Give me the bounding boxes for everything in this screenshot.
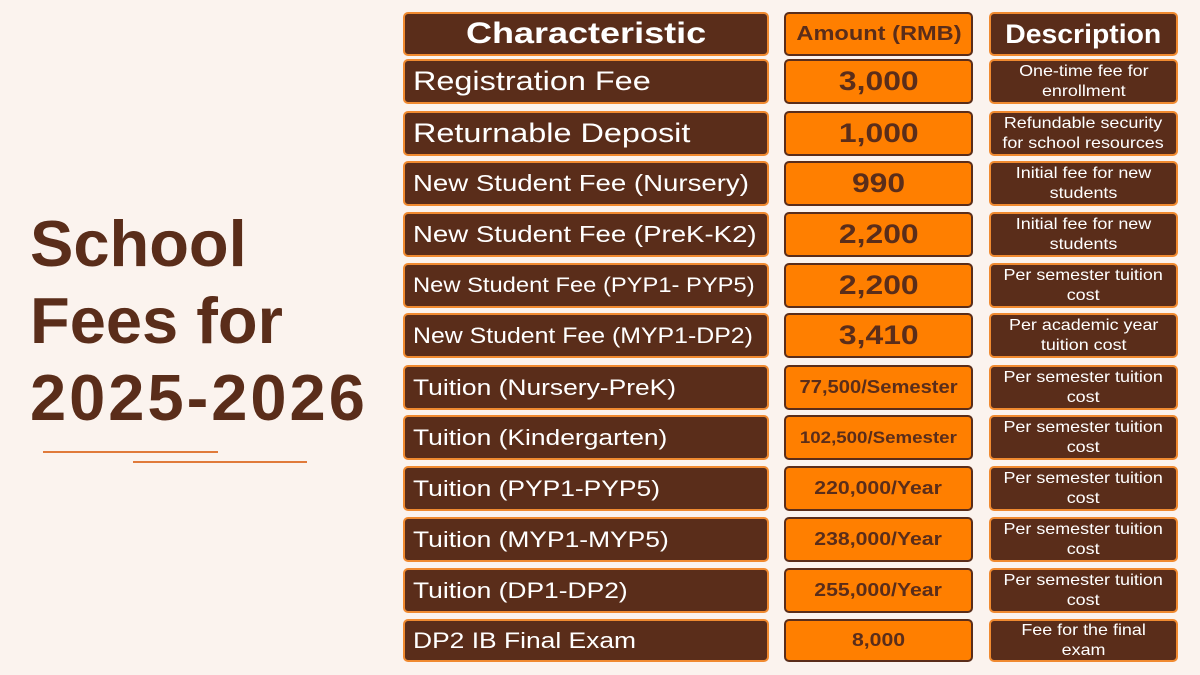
table rows: Tuition (DP1-DP2) [413,578,628,602]
table rows: 2,200 [839,219,918,249]
table rows: cost [1067,286,1100,304]
table rows: 102,500/Semester [800,428,957,446]
table rows: students [1050,236,1117,252]
table rows: Tuition (Nursery-PreK) [413,374,676,400]
table rows: Refundable security [1004,114,1163,132]
title: 2025-2026 [30,361,368,434]
table rows: Per semester tuition [1004,418,1163,436]
table rows: 3,410 [839,320,918,350]
header: characteristic: Characteristic [466,17,706,50]
table rows: 255,000/Year [815,580,942,600]
title [30,207,368,434]
table rows: Per semester tuition [1004,368,1163,386]
table rows: 77,500/Semester [799,377,958,397]
table rows: Per semester tuition [1004,266,1163,284]
table rows: Initial fee for new [1016,216,1151,232]
table rows: cost [1067,540,1100,558]
table rows: 238,000/Year [815,529,942,549]
table rows: 8,000 [852,630,905,650]
table rows: Per semester tuition [1004,572,1163,588]
header: amount: Amount (RMB) [796,22,961,44]
header: description [989,12,1178,56]
header: characteristic [403,12,769,56]
table rows: enrollment [1042,82,1125,100]
table rows: Tuition (Kindergarten) [413,424,667,450]
header: description: Description [1006,19,1161,49]
table rows: New Student Fee (MYP1-DP2) [413,322,753,348]
table rows: New Student Fee (PYP1- PYP5) [413,274,755,296]
table rows: cost [1067,592,1100,608]
table rows: cost [1067,388,1100,406]
table rows: Tuition (MYP1-MYP5) [413,526,669,552]
table rows: New Student Fee (Nursery) [413,170,749,196]
table rows: New Student Fee (PreK-K2) [413,221,757,247]
table rows: Returnable Deposit [413,118,690,148]
table rows: One-time fee for [1019,62,1148,80]
table rows: 2,200 [839,270,918,300]
table rows: 990 [852,168,905,198]
title: Fees for [30,284,283,357]
table rows: tuition cost [1041,336,1126,354]
table rows: Per semester tuition [1004,470,1163,486]
table rows: Per academic year [1009,316,1158,334]
table rows: 1,000 [839,118,918,148]
table rows: cost [1067,490,1100,506]
table rows: 220,000/Year [815,478,942,498]
table rows: Tuition (PYP1-PYP5) [413,476,660,500]
table rows: cost [1067,438,1100,456]
table rows: Per semester tuition [1004,520,1163,538]
table rows: Fee for the final [1021,622,1146,638]
table rows: Initial fee for new [1016,164,1151,182]
table rows: 3,000 [839,66,918,96]
table rows: exam [1062,642,1105,658]
table rows: Registration Fee [413,66,651,96]
title: School [30,207,247,280]
table rows: students [1050,184,1117,202]
table rows: DP2 IB Final Exam [413,628,636,652]
table rows: for school resources [1003,134,1164,152]
header: amount [784,12,973,56]
